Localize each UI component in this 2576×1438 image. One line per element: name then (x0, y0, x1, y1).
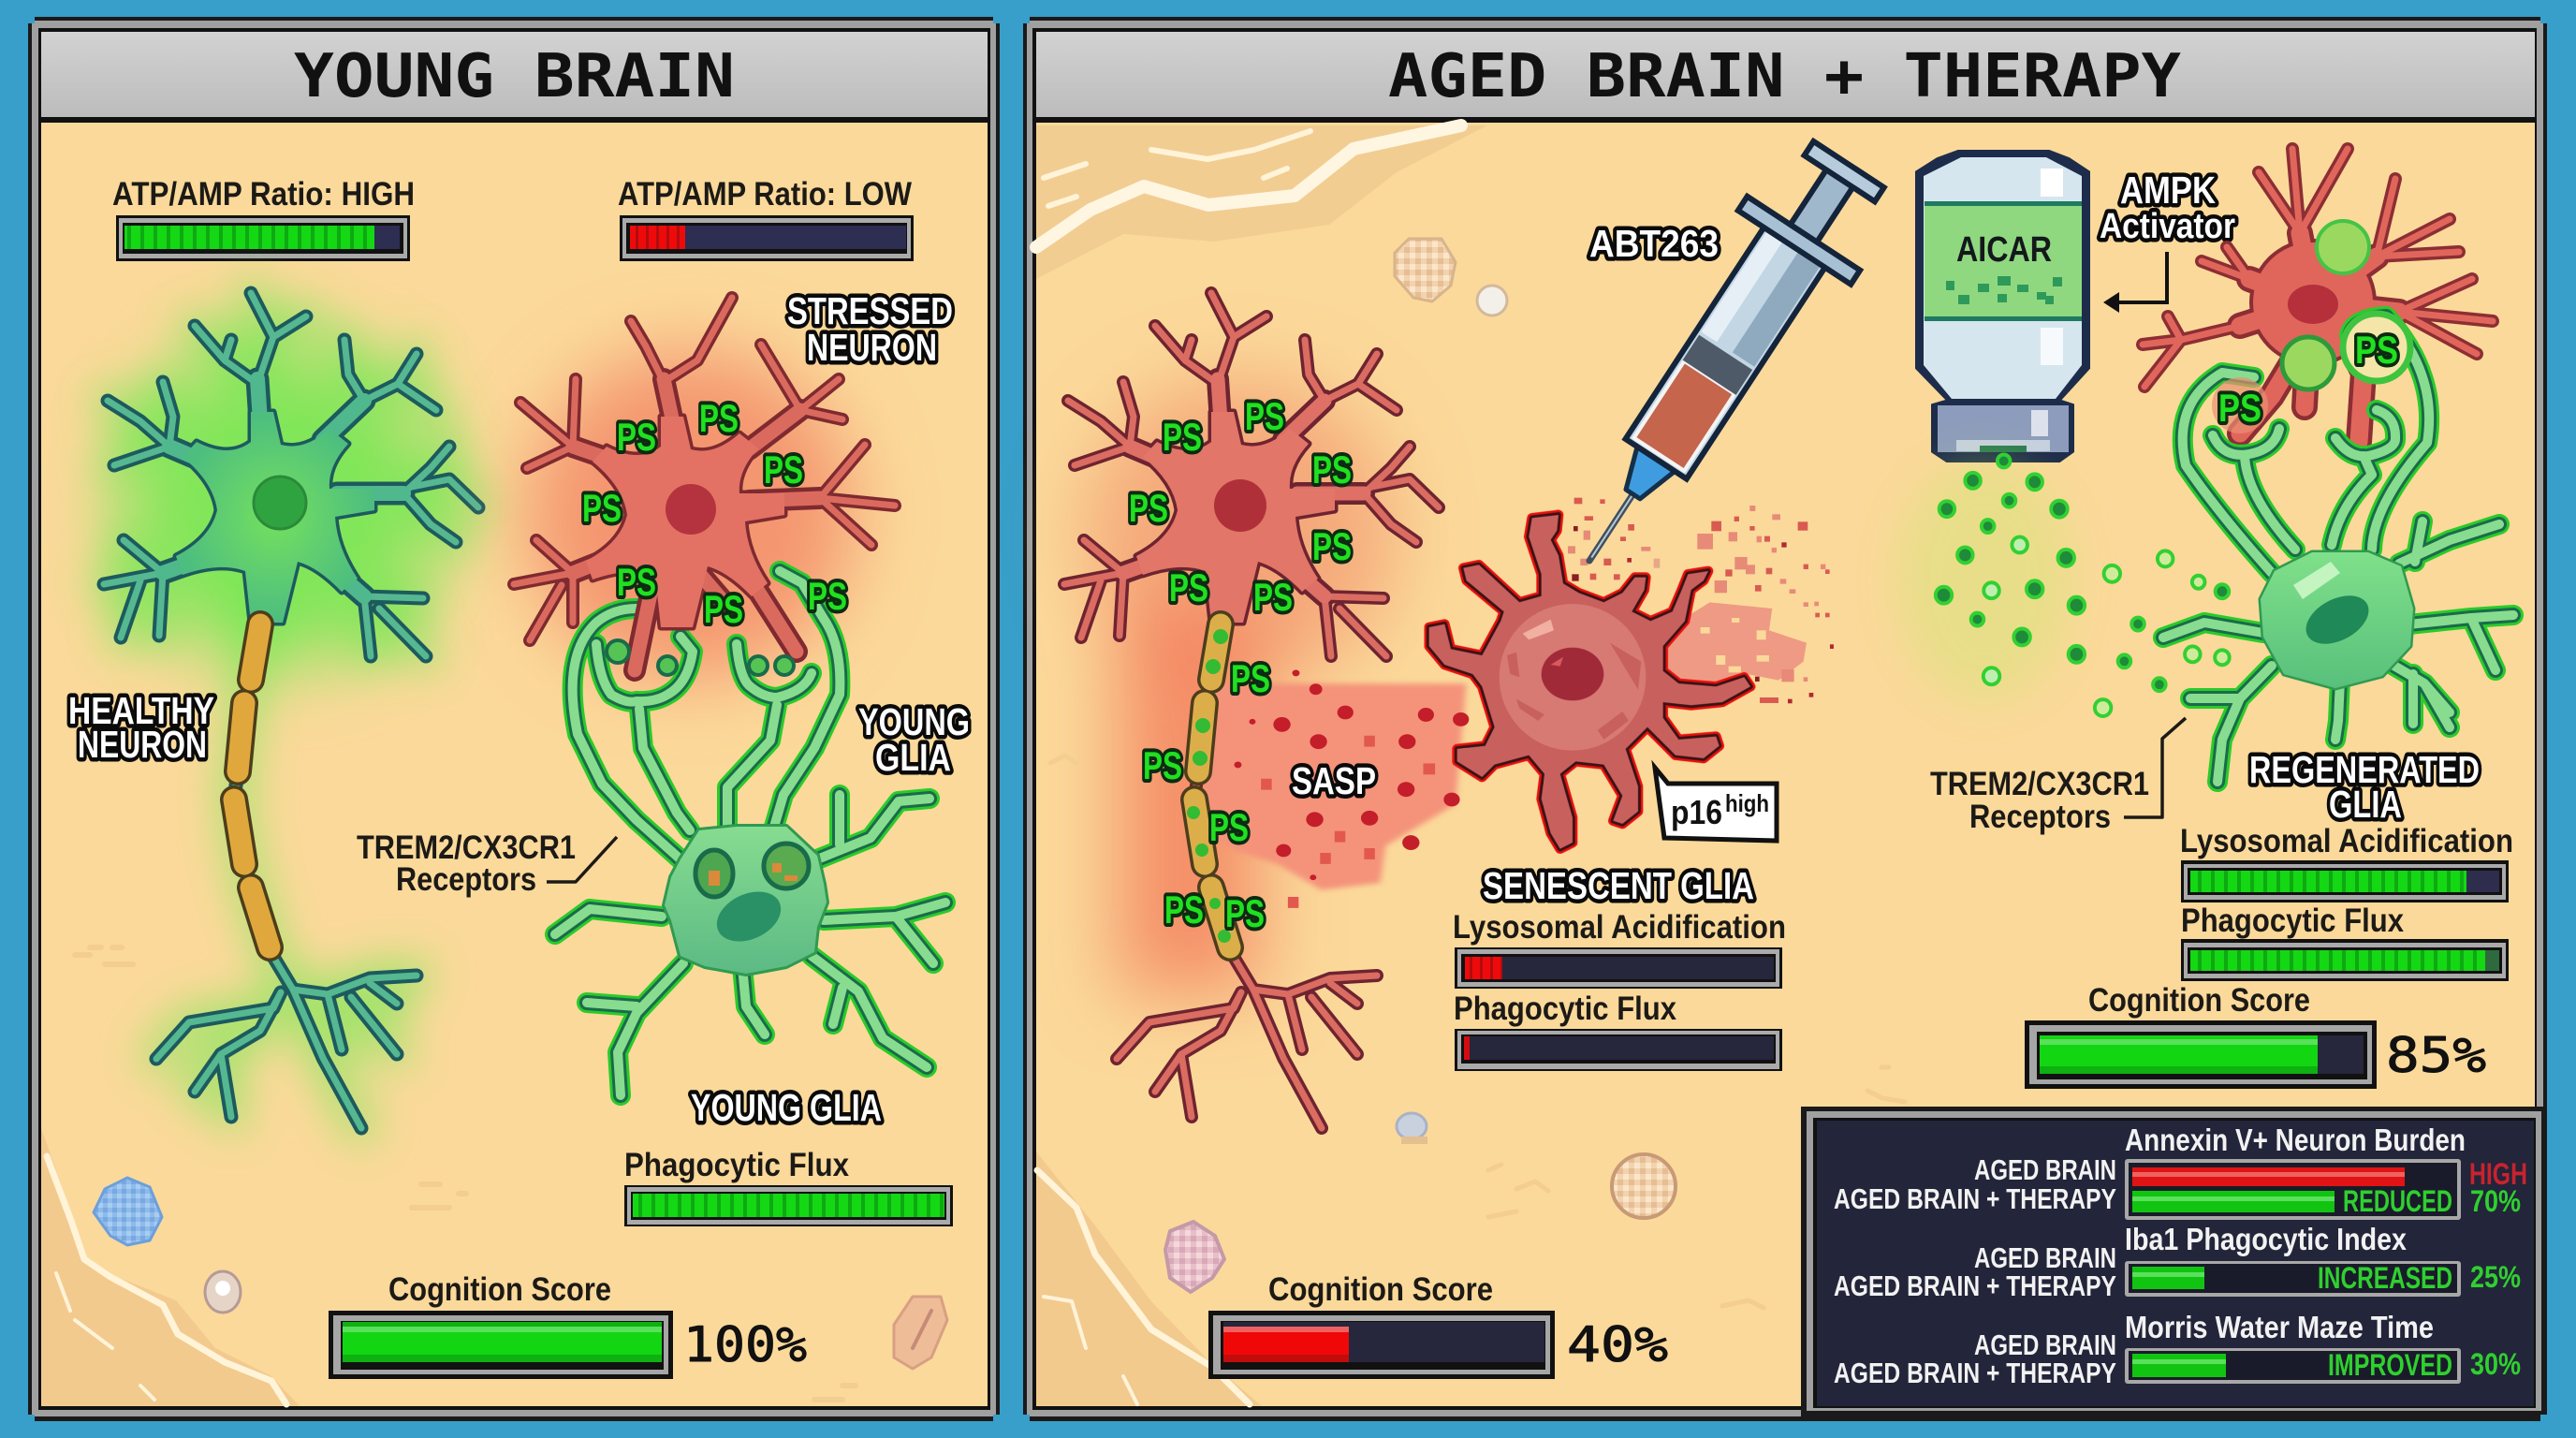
aged neuron glow (1086, 379, 1395, 992)
young glia side label: GLIA (875, 736, 951, 779)
PS markers (582, 396, 847, 631)
phagocytic bar (2181, 939, 2509, 981)
results table panel (1801, 1107, 2547, 1416)
row: annexin: Annexin V+ Neuron Burden (2125, 1123, 2466, 1157)
SASP cloud (1203, 683, 1466, 890)
receptor callout: Receptors (396, 861, 536, 898)
ATP high bar (116, 215, 410, 261)
myelin PS clusters (1187, 629, 1231, 943)
title: YOUNG BRAIN (294, 42, 735, 111)
row: annexin: AGED BRAIN (1974, 1153, 2116, 1186)
PS markers: PS (582, 486, 622, 530)
p16 high tag: p16 (1671, 793, 1722, 831)
header bar (1036, 32, 2535, 117)
aged PS markers: PS (1312, 448, 1352, 492)
lysosomal label: Lysosomal Acidification (1453, 909, 1786, 946)
phagocytic label: Phagocytic Flux (2181, 902, 2404, 939)
header bar (41, 32, 988, 117)
engulfed PS vesicles: PS (2218, 386, 2261, 430)
shell: blue (94, 1178, 162, 1245)
lysosomal bar (2181, 860, 2509, 902)
aged PS markers: PS (1253, 575, 1293, 619)
shell: tan (894, 1297, 947, 1369)
lysosomal bar (1455, 947, 1782, 989)
receptor callout: TREM2/CX3CR1 (357, 829, 576, 866)
pebble (1477, 286, 1507, 315)
senescent glia (1429, 515, 1750, 849)
SASP particles (1234, 669, 1469, 908)
stressed neuron glow (526, 351, 854, 679)
panel background: sand (41, 123, 988, 1406)
aged PS markers: PS (1169, 565, 1208, 609)
hook vesicles (607, 640, 794, 675)
nucleus (709, 882, 789, 951)
ATP low label: ATP/AMP Ratio: LOW (618, 176, 912, 213)
row: morris water maze: 30% (2470, 1347, 2521, 1381)
young glia side label (858, 700, 970, 779)
cognition value: 85% (2386, 1028, 2486, 1084)
phagocytic label: Phagocytic Flux (1454, 990, 1676, 1027)
aged PS markers (1129, 394, 1352, 935)
beach corner (41, 947, 856, 1406)
phagocytic flux label: Phagocytic Flux (624, 1147, 849, 1183)
aged PS markers: PS (1164, 888, 1204, 932)
ATP high label: ATP/AMP Ratio: HIGH (112, 176, 415, 213)
lysosomal label: Lysosomal Acidification (2180, 823, 2513, 859)
PS markers: PS (617, 560, 656, 604)
AICAR text: AICAR (1956, 230, 2052, 270)
row: morris water maze: Morris Water Maze Time (2125, 1310, 2434, 1344)
healthy neuron label: HEALTHY (68, 689, 214, 732)
row: morris water maze: AGED BRAIN (1974, 1328, 2116, 1361)
young glia label: YOUNG GLIA (691, 1086, 882, 1129)
syringe (1533, 127, 1905, 597)
AMPK label (2100, 169, 2235, 246)
aged PS markers: PS (1245, 394, 1284, 438)
p16 high tag: high (1725, 789, 1769, 817)
cognition label: Cognition Score (1268, 1271, 1493, 1308)
healthy neuron label (68, 689, 214, 766)
regenerated neuron (2143, 149, 2493, 442)
aged PS markers: PS (1225, 891, 1265, 935)
pebble grey (1397, 1113, 1427, 1144)
frame corners (1023, 17, 2547, 1421)
row: annexin: REDUCED (2343, 1184, 2452, 1218)
stressed neuron label: NEURON (807, 326, 937, 369)
cognition bar (1208, 1311, 1555, 1379)
young glia (555, 571, 945, 1095)
regenerated glia label: REGENERATED (2249, 748, 2480, 791)
healthy neuron (104, 293, 478, 1128)
phagosomes (695, 844, 809, 897)
aged PS markers: PS (1231, 656, 1270, 700)
row: iba1: 25% (2470, 1260, 2521, 1294)
shell: pebble (205, 1271, 241, 1313)
panel: aged brain + therapy (1023, 17, 2547, 1421)
row: morris water maze (1834, 1310, 2521, 1389)
shell: tan round (1612, 1154, 1676, 1218)
arrow to vial (2103, 252, 2167, 313)
phagocytic flux bar (624, 1185, 953, 1226)
regenerated glia (2163, 316, 2513, 782)
shell: top scallop (1395, 239, 1456, 301)
row: morris water maze: AGED BRAIN + THERAPY (1834, 1357, 2116, 1389)
cognition bar (329, 1311, 673, 1379)
row: iba1 (1834, 1222, 2521, 1302)
ATP low bar (620, 215, 914, 261)
ABT263 label: ABT263 (1589, 222, 1719, 265)
row: iba1: AGED BRAIN + THERAPY (1834, 1269, 2116, 1302)
SASP label: SASP (1292, 759, 1376, 802)
cognition label: Cognition Score (2088, 982, 2310, 1019)
regenerated glia label (2249, 748, 2480, 826)
aged PS markers: PS (1129, 486, 1168, 530)
stressed neuron label (787, 289, 953, 369)
healthy neuron label: NEURON (78, 723, 207, 766)
p16 high tag (1655, 768, 1777, 841)
row: iba1: AGED BRAIN (1974, 1241, 2116, 1274)
aged neuron (1064, 293, 1439, 1128)
aged PS markers: PS (1143, 743, 1182, 787)
row: annexin: 70% (2470, 1184, 2521, 1218)
panel: young brain (28, 17, 1000, 1421)
PS markers: PS (699, 396, 739, 440)
senescent glia label: SENESCENT GLIA (1483, 864, 1754, 907)
beach top (1036, 125, 1487, 279)
row: morris water maze: IMPROVED (2328, 1348, 2452, 1382)
cognition value: 40% (1567, 1317, 1668, 1373)
aged PS markers: PS (1312, 524, 1352, 568)
frame corners (28, 17, 1000, 1421)
beach bottom (1036, 1152, 1262, 1406)
nucleus (2298, 586, 2377, 653)
receptor callout: TREM2/CX3CR1 (1930, 766, 2149, 802)
receptor callout: Receptors (1969, 799, 2111, 835)
row: annexin (1834, 1123, 2527, 1220)
row: iba1: INCREASED (2318, 1261, 2452, 1295)
young glia side label: YOUNG (858, 700, 970, 743)
PS markers: PS (764, 448, 803, 492)
AICAR spray (1895, 454, 2230, 716)
stressed neuron (514, 298, 895, 670)
cognition label: Cognition Score (388, 1271, 611, 1308)
engulfed PS vesicles: PS (2355, 328, 2398, 372)
PS markers: PS (704, 587, 743, 631)
row: annexin: AGED BRAIN + THERAPY (1834, 1182, 2116, 1215)
PS markers: PS (617, 415, 656, 459)
receptor callout (357, 829, 617, 898)
aged PS markers: PS (1209, 805, 1249, 849)
aged PS markers: PS (1163, 415, 1202, 459)
regenerated glia label: GLIA (2329, 783, 2402, 826)
stressed neuron label: STRESSED (787, 289, 953, 332)
receptor callout (1930, 718, 2186, 835)
shell: pink (1165, 1222, 1224, 1292)
cognition value: 100% (683, 1317, 807, 1373)
panel background: sand (1036, 123, 2535, 1406)
engulfed PS vesicles (2212, 221, 2410, 433)
title: AGED BRAIN + THERAPY (1388, 42, 2182, 111)
AMPK label: AMPK (2120, 169, 2216, 212)
row: iba1: Iba1 Phagocytic Index (2125, 1222, 2408, 1256)
vial specks (1946, 276, 2062, 304)
AMPK label: Activator (2100, 207, 2235, 246)
AICAR vial (1917, 152, 2088, 461)
sand marks (1050, 756, 1905, 1308)
phagocytic bar (1455, 1029, 1782, 1071)
PS markers: PS (808, 574, 847, 618)
senescence debris (1568, 498, 1834, 703)
row: annexin: HIGH (2469, 1157, 2527, 1191)
cognition bar (2025, 1020, 2377, 1089)
